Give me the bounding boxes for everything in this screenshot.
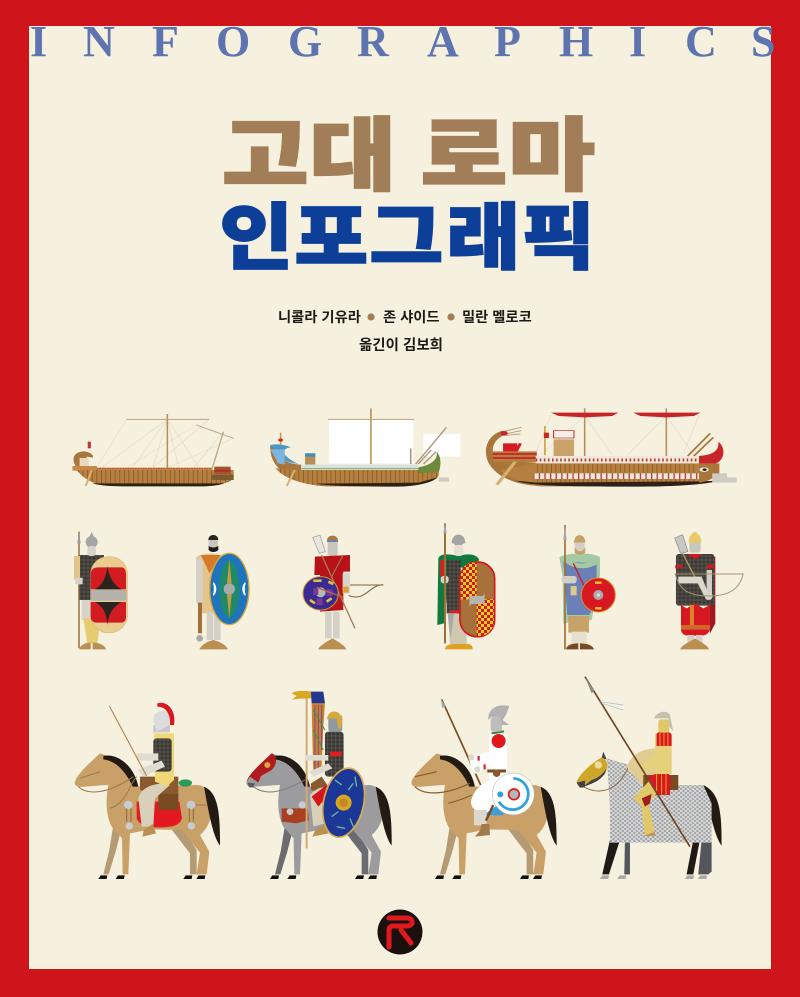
soldier 5 (559, 525, 615, 649)
horse and rider 3 (411, 698, 557, 879)
title: line 2: 인포그래픽 (220, 199, 595, 279)
ship 3 (486, 408, 737, 487)
soldier 1 (74, 532, 127, 649)
ship 2 (270, 408, 460, 487)
soldier 3 (303, 535, 383, 649)
foot soldiers row, left half (74, 532, 383, 649)
horse and rider 4 (577, 677, 722, 879)
cavalry row (75, 677, 722, 879)
soldier 4 (437, 523, 495, 649)
horse and rider 2 (246, 691, 392, 879)
authors line: 니콜라 기유라 (278, 309, 361, 326)
horse and rider 1 (75, 703, 220, 879)
overline: INFOGRAPHICS: INFOGRAPHICS (30, 17, 775, 66)
separator dot 2 (447, 313, 455, 321)
ship 1 (72, 414, 234, 486)
authors line: 밀란 멜로코 (462, 309, 532, 326)
soldier 6 (675, 532, 743, 649)
authors line: 존 샤이드 (383, 309, 440, 326)
separator dot 1 (367, 313, 375, 321)
title: line 1: 고대 로마 (222, 112, 595, 201)
foot soldiers row, right half (437, 523, 743, 649)
translator line: 옮긴이 김보희 (359, 337, 443, 354)
publisher logo (378, 910, 422, 954)
soldier 2 (196, 535, 249, 649)
authors line (278, 309, 532, 326)
ships row (72, 408, 737, 487)
